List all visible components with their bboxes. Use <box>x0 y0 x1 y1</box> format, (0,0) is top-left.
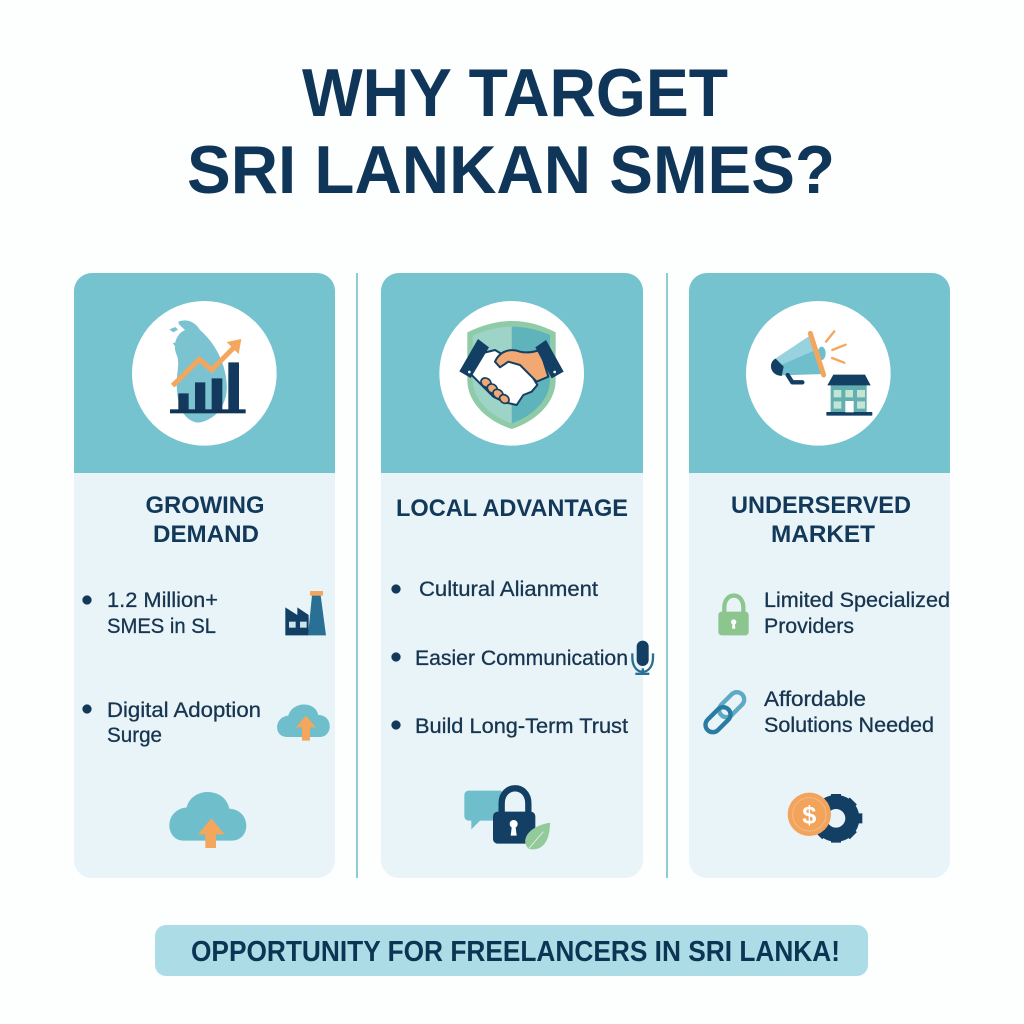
icon: factory <box>285 591 326 635</box>
icon: green padlock <box>718 596 749 635</box>
icon: large cloud upload <box>169 792 246 848</box>
title <box>187 55 835 208</box>
bullet: 1.2 million SMEs: 1.2 Million+ <box>107 589 218 612</box>
heading <box>146 492 264 548</box>
bullet: limited specialized providers: Limited Specialized <box>764 589 950 612</box>
icon: coin and gear: $ <box>802 801 816 829</box>
bullet: build trust: Build Long-Term Trust <box>415 715 628 738</box>
bullet: limited specialized providers <box>764 589 950 638</box>
bullet: limited specialized providers: Providers <box>764 615 854 638</box>
panel background <box>381 273 643 878</box>
icon: chain link <box>702 689 747 735</box>
heading: DEMAND <box>153 521 259 548</box>
panel: local advantage <box>381 273 653 878</box>
icon: Sri Lanka map with growth chart <box>132 301 277 446</box>
panel: underserved market <box>689 273 950 878</box>
panel: growing demand <box>74 273 335 878</box>
panel header band <box>74 273 335 473</box>
heading: GROWING <box>146 492 264 519</box>
heading: MARKET <box>771 521 875 548</box>
heading: UNDERSERVED <box>731 492 911 519</box>
panel header band <box>381 273 643 473</box>
icon: coin and gear <box>788 793 862 843</box>
heading <box>731 492 911 548</box>
banner: OPPORTUNITY FOR FREELANCERS IN SRI LANKA! <box>191 936 840 968</box>
bullet: digital adoption <box>82 699 261 747</box>
bullet: easier communication: Easier Communication <box>415 647 628 670</box>
bullet: digital adoption: Surge <box>107 724 162 747</box>
bullet: 1.2 million SMEs <box>82 589 218 638</box>
icon: small cloud upload <box>277 704 330 741</box>
bullet: affordable solutions: Solutions Needed <box>764 714 934 737</box>
bullet: affordable solutions: Affordable <box>764 688 866 711</box>
title: SRI LANKAN SMES? <box>187 132 835 208</box>
panel background <box>689 273 950 878</box>
banner <box>155 925 868 976</box>
bullet: 1.2 million SMEs: SMES in SL <box>107 615 216 638</box>
icon: handshake on shield <box>439 301 584 446</box>
panel background <box>74 273 335 878</box>
bullet: cultural alignment: Cultural Alianment <box>419 578 598 601</box>
icon: microphone <box>632 641 653 675</box>
icon: megaphone and building <box>746 301 891 446</box>
panel header band <box>689 273 950 473</box>
title: WHY TARGET <box>302 55 728 131</box>
heading: LOCAL ADVANTAGE <box>396 495 628 522</box>
bullet: affordable solutions <box>764 688 934 737</box>
icon: chat, padlock and leaf <box>464 788 550 849</box>
bullet: digital adoption: Digital Adoption <box>107 699 261 722</box>
